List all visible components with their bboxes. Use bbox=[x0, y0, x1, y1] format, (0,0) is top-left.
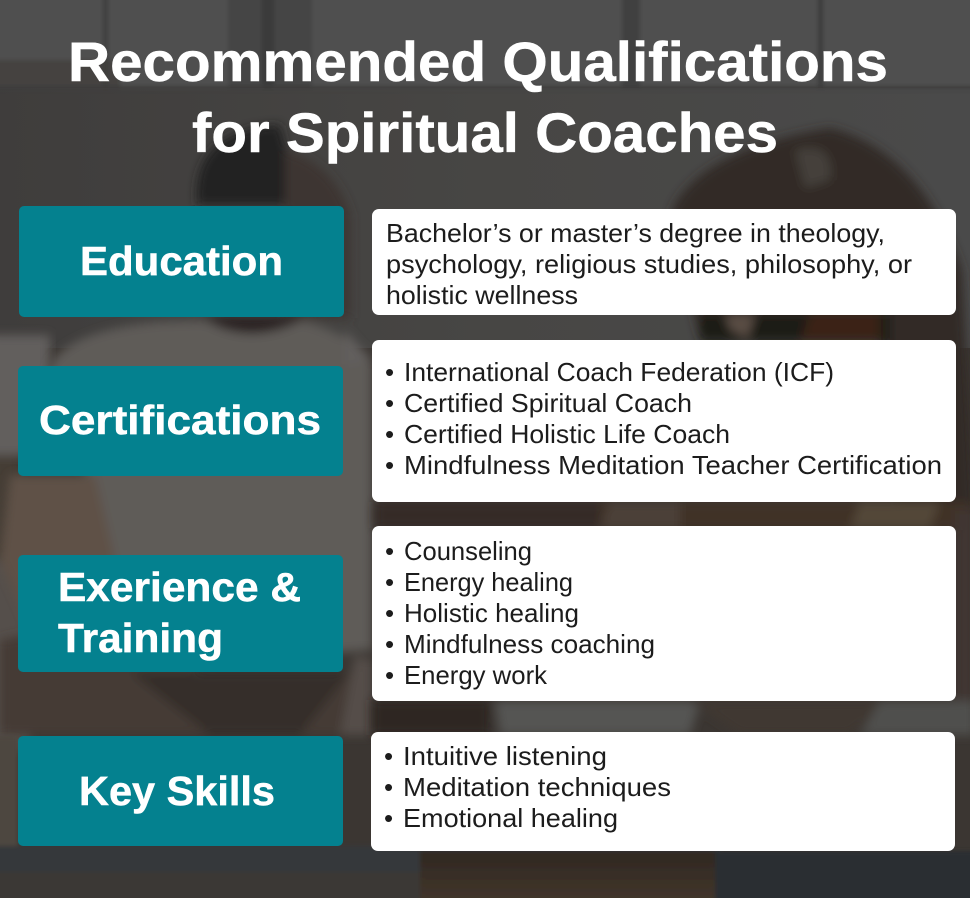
certifications details card: • bbox=[385, 388, 394, 418]
certifications details card: • bbox=[385, 450, 394, 480]
experience details card: • bbox=[385, 629, 394, 659]
left pillow and bench bbox=[0, 335, 50, 750]
experience details card: Energy work bbox=[404, 660, 548, 690]
experience label box bbox=[18, 555, 343, 672]
panel: certifications bbox=[18, 340, 956, 502]
experience details card: Holistic healing bbox=[404, 598, 579, 628]
education details card bbox=[372, 209, 956, 315]
experience details card: • bbox=[385, 598, 394, 628]
experience label bbox=[58, 564, 301, 661]
title: Recommended Qualifications bbox=[68, 30, 888, 93]
certifications details card: Mindfulness Meditation Teacher Certification bbox=[404, 450, 942, 480]
certifications details card bbox=[372, 340, 956, 502]
certifications details card: • bbox=[385, 357, 394, 387]
certifications details card: • bbox=[385, 419, 394, 449]
experience details card: • bbox=[385, 536, 394, 566]
experience details card: Counseling bbox=[404, 536, 532, 566]
certifications details card: Certified Spiritual Coach bbox=[404, 388, 692, 418]
man seated bbox=[0, 125, 372, 735]
experience details card: Energy healing bbox=[404, 567, 573, 597]
certifications label: Certifications bbox=[39, 397, 321, 443]
key skills details card bbox=[371, 732, 955, 851]
certifications details card: International Coach Federation (ICF) bbox=[404, 357, 834, 387]
certifications label box bbox=[18, 366, 343, 476]
window wall bbox=[0, 0, 970, 89]
key skills details card: • bbox=[384, 741, 393, 771]
experience details card bbox=[372, 526, 956, 701]
education details card: psychology, religious studies, philosophy, or bbox=[386, 249, 912, 279]
key skills label box bbox=[18, 736, 343, 846]
key skills details card: Meditation techniques bbox=[403, 772, 671, 802]
experience details card: Mindfulness coaching bbox=[404, 629, 655, 659]
education label box bbox=[19, 206, 344, 317]
panel: education bbox=[19, 206, 956, 317]
experience details card: • bbox=[385, 567, 394, 597]
education details card: holistic wellness bbox=[386, 280, 578, 310]
title: for Spiritual Coaches bbox=[192, 101, 778, 164]
experience label: Exerience & bbox=[58, 564, 301, 610]
key skills details card: • bbox=[384, 803, 393, 833]
education details card: Bachelor’s or master’s degree in theology, bbox=[386, 218, 885, 248]
title bbox=[68, 30, 888, 164]
panel: key skills bbox=[18, 732, 955, 851]
experience label: Training bbox=[58, 615, 223, 661]
panel: experience and training bbox=[18, 526, 956, 701]
key skills label: Key Skills bbox=[79, 768, 275, 814]
key skills details card: Emotional healing bbox=[403, 803, 618, 833]
woman seated bbox=[372, 128, 970, 735]
education label: Education bbox=[80, 238, 283, 284]
experience details card: • bbox=[385, 660, 394, 690]
yoga mat and floor bbox=[0, 736, 970, 898]
certifications details card: Certified Holistic Life Coach bbox=[404, 419, 730, 449]
key skills details card: Intuitive listening bbox=[403, 741, 607, 771]
key skills details card: • bbox=[384, 772, 393, 802]
